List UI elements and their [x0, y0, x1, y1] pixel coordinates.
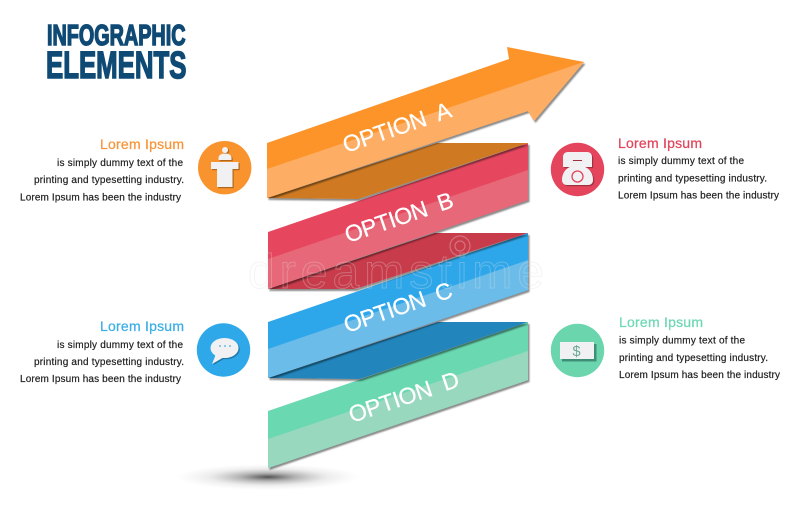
body text: Lorem Ipsum has been the industry	[20, 192, 181, 204]
panel: top right	[551, 135, 779, 202]
body text	[619, 336, 780, 381]
body text: Lorem Ipsum has been the industry	[618, 190, 779, 202]
ribbon	[267, 47, 584, 468]
fold: red	[268, 233, 528, 289]
panel: bottom right	[551, 314, 780, 381]
body text	[20, 340, 184, 385]
fold: blue	[268, 322, 528, 379]
heading: Lorem Ipsum	[100, 136, 184, 152]
fold: orange	[267, 143, 528, 199]
body text: printing and typesetting industry.	[34, 175, 184, 186]
band: option D	[268, 322, 528, 468]
label: option B: OPTION B	[341, 187, 457, 248]
icon: speaker at podium	[198, 141, 251, 194]
body text	[20, 158, 184, 204]
band: option C	[268, 233, 528, 378]
body text: Lorem Ipsum has been the industry	[20, 374, 181, 385]
band: option B	[268, 143, 528, 289]
body text: is simply dummy text of the	[57, 340, 183, 351]
label: option D: OPTION D	[345, 366, 462, 428]
body text: printing and typesetting industry.	[619, 353, 768, 364]
body text: is simply dummy text of the	[619, 336, 745, 346]
panel: bottom left	[20, 318, 250, 385]
band: option A arrow	[267, 47, 584, 198]
label: option C: OPTION C	[340, 277, 456, 338]
ground shadow	[176, 464, 360, 490]
title: INFOGRAPHIC	[47, 20, 186, 52]
body text: Lorem Ipsum has been the industry	[619, 370, 780, 381]
body text: is simply dummy text of the	[57, 158, 183, 169]
heading: Lorem Ipsum	[618, 135, 702, 151]
label: option A: OPTION A	[339, 96, 455, 158]
heading: Lorem Ipsum	[100, 318, 184, 334]
icon: telephone	[551, 143, 604, 196]
icon: speech bubble	[197, 323, 250, 377]
title: ELEMENTS	[46, 45, 186, 87]
title	[46, 20, 186, 87]
icon: banknote	[551, 324, 604, 377]
icon: banknote: $	[572, 344, 581, 360]
body text: is simply dummy text of the	[618, 156, 744, 167]
watermark: dreamstime	[248, 246, 544, 299]
body text: printing and typesetting industry.	[34, 357, 184, 368]
panel: top left	[20, 136, 251, 204]
heading: Lorem Ipsum	[619, 314, 703, 330]
body text	[618, 156, 779, 202]
body text: printing and typesetting industry.	[618, 174, 767, 184]
